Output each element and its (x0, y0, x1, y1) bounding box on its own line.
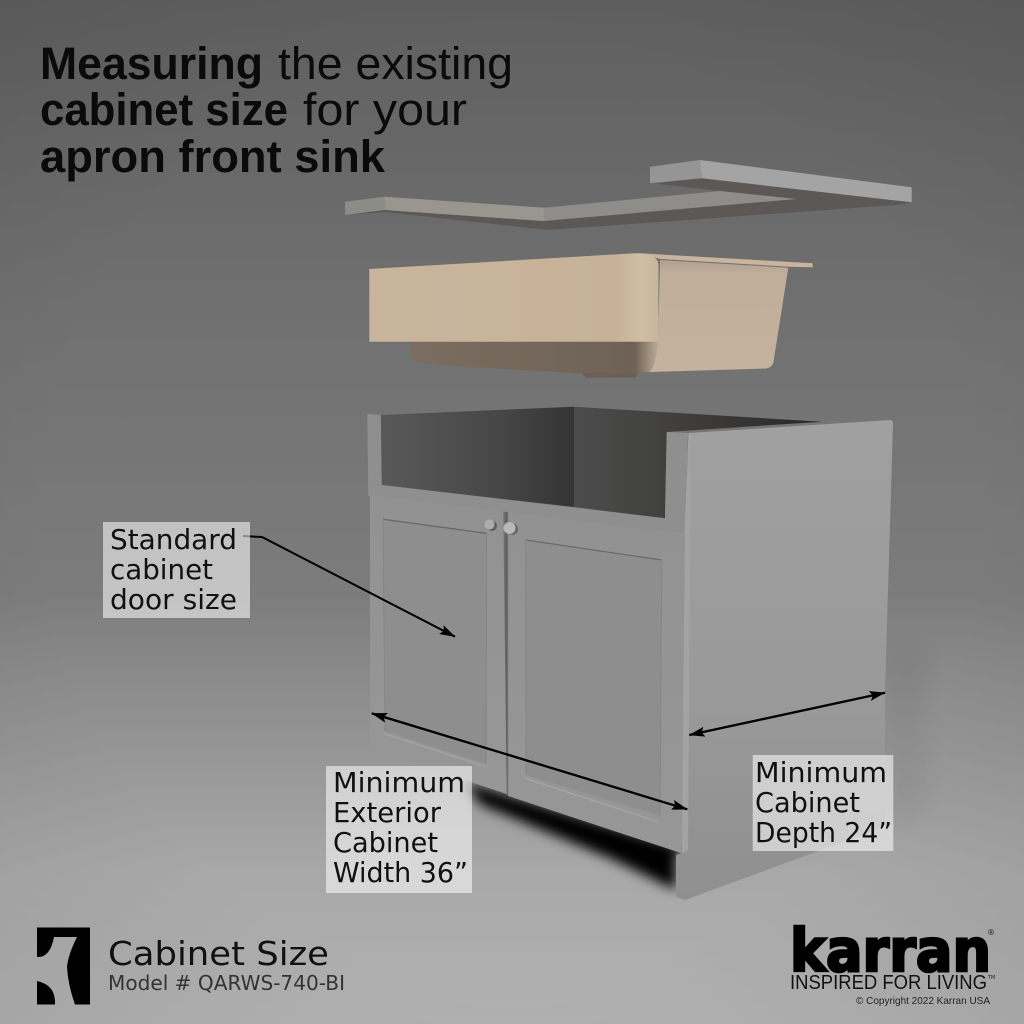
label: cabinet width (326, 766, 472, 893)
label: cabinet depth: Cabinet (755, 786, 860, 819)
heading: cabinet size and model (108, 934, 345, 995)
title: for your (303, 84, 467, 135)
door gap (503, 512, 508, 796)
front stile (682, 433, 691, 854)
logo: Karran: © Copyright 2022 Karran USA (856, 995, 990, 1007)
label: cabinet depth: Minimum (755, 756, 887, 789)
label: cabinet width: Minimum (333, 766, 465, 799)
label: cabinet width: Cabinet (333, 826, 438, 859)
label: cabinet width: Exterior (333, 796, 441, 829)
title: Measuring (40, 38, 263, 89)
label: cabinet depth: Depth 24” (755, 816, 892, 849)
logo: Karran: INSPIRED FOR LIVING (790, 972, 987, 994)
cabinet interior (381, 407, 574, 507)
arrow: cabinet width (372, 713, 687, 809)
sink apron front (369, 253, 658, 342)
logo: Karran: ® (987, 928, 995, 937)
arrow: cabinet depth (689, 693, 885, 735)
sink rim (640, 253, 813, 267)
title: cabinet size (40, 84, 288, 135)
door knobs (484, 520, 518, 535)
label: cabinet depth (753, 755, 893, 851)
logo: Karran: karran (790, 916, 991, 985)
cabinet side panel (676, 420, 893, 900)
icon: brand mark (37, 928, 90, 1004)
label: door size: cabinet (110, 553, 213, 586)
right door (508, 512, 685, 853)
left door (370, 495, 507, 794)
arrow: door size (243, 536, 455, 637)
logo: Karran: TM (987, 975, 995, 981)
cabinet front frame (367, 414, 688, 533)
label: door size (103, 522, 250, 618)
sink side wall (650, 260, 788, 372)
title: apron front sink (40, 131, 386, 182)
sink (369, 253, 813, 378)
floor shadow under doors (465, 782, 684, 890)
label: door size: Standard (110, 523, 237, 556)
label: cabinet width: Width 36” (333, 856, 468, 889)
cabinet (367, 407, 893, 900)
title: the existing (278, 38, 513, 89)
sink basin underside (410, 341, 660, 374)
sink drain nub (582, 372, 638, 378)
heading: cabinet size and model: Cabinet Size (108, 934, 329, 973)
heading: cabinet size and model: Model # QARWS-740-BI (108, 971, 345, 995)
title (40, 38, 513, 182)
label: door size: door size (110, 583, 237, 616)
countertop (345, 160, 912, 230)
